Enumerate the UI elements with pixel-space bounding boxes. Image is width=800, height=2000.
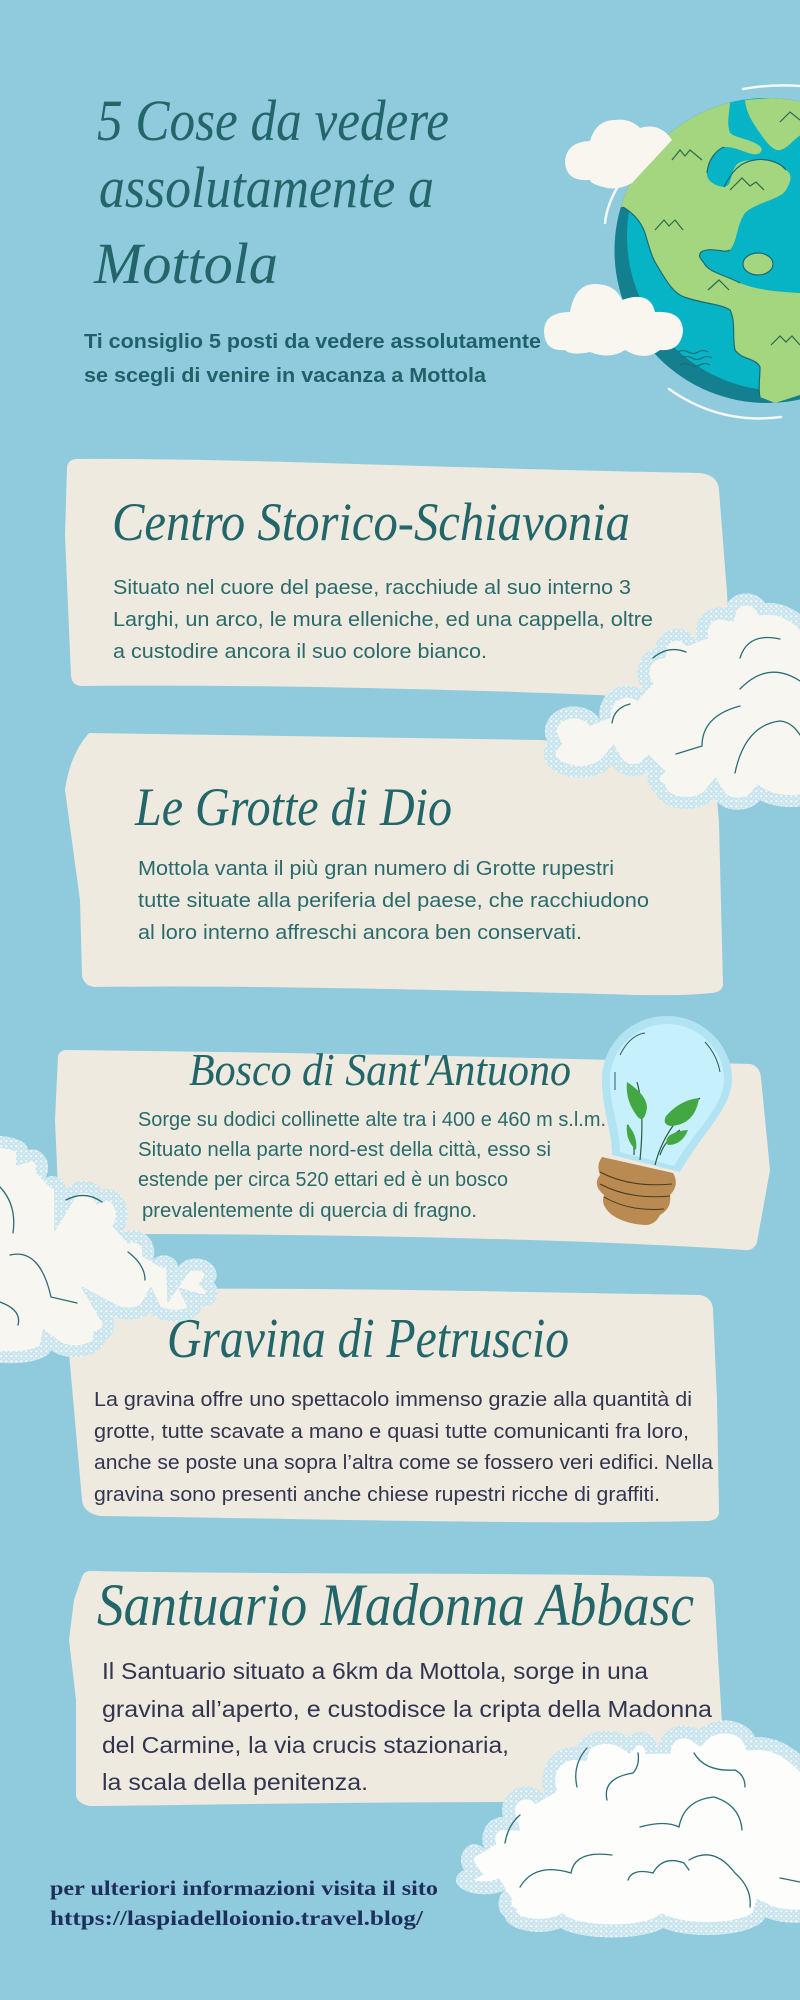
body text: del Carmine, la via crucis stazionaria, [102, 1732, 509, 1758]
body text: Situato nella parte nord-est della città, esso si [138, 1139, 551, 1161]
body text [138, 1109, 606, 1222]
icon: earth globe [544, 81, 800, 418]
footer link: per ulteriori informazioni visita il sito [50, 1876, 438, 1900]
body text: a custodire ancora il suo colore bianco. [113, 641, 487, 663]
title: 5 Cose da vedere [97, 88, 449, 153]
cloud: bottom right [456, 1720, 800, 1937]
heading: Le Grotte di Dio [134, 777, 452, 837]
white orbit arcs [605, 85, 800, 418]
body text: estende per circa 520 ettari ed è un bosco [138, 1169, 508, 1191]
body text: Il Santuario situato a 6km da Mottola, sorge in una [102, 1658, 648, 1684]
stems and leaves [627, 1082, 700, 1165]
panel: Santuario Madonna Abbasc [71, 1572, 723, 1804]
subtitle [84, 331, 541, 387]
body text: Situato nel cuore del paese, racchiude al suo interno 3 [113, 577, 631, 599]
heading: Centro Storico-Schiavonia [112, 492, 630, 552]
glass bulb [602, 1016, 732, 1172]
cloud: upper right [544, 593, 800, 810]
panel: Bosco di Sant'Antuono [57, 1044, 768, 1248]
heading: Santuario Madonna Abbasc [97, 1572, 694, 1638]
body text: gravina sono presenti anche chiese rupestri ricche di graffiti. [94, 1484, 660, 1506]
body text: al loro interno affreschi ancora ben conservati. [138, 922, 582, 944]
body text: Larghi, un arco, le mura elleniche, ed una cappella, oltre [113, 609, 653, 631]
title: assolutamente a [99, 155, 434, 220]
body text [94, 1389, 714, 1506]
body text: Sorge su dodici collinette alte tra i 400 e 460 m s.l.m. [138, 1109, 606, 1131]
body text: Mottola vanta il più gran numero di Grotte rupestri [138, 858, 614, 880]
body text [102, 1658, 712, 1795]
mountains [655, 112, 800, 345]
globe sphere [614, 98, 800, 403]
cloud lower [544, 284, 683, 356]
panel: Le Grotte di Dio [67, 735, 721, 993]
subtitle: se scegli di venire in vacanza a Mottola [84, 365, 487, 387]
body text: la scala della penitenza. [102, 1769, 368, 1795]
glass highlights [615, 1033, 720, 1090]
body text: anche se poste una sopra l’altra come se fossero veri edifici. Nella [94, 1452, 714, 1474]
body text [113, 577, 653, 663]
body text [138, 858, 649, 944]
icon: light bulb with plant [597, 1016, 732, 1225]
heading: Bosco di Sant'Antuono [189, 1044, 571, 1095]
heading: Gravina di Petruscio [167, 1308, 569, 1370]
title [93, 88, 449, 296]
waves [678, 350, 712, 366]
subtitle: Ti consiglio 5 posti da vedere assolutamente [84, 331, 541, 353]
cloud: left [0, 1136, 218, 1363]
cloud upper [565, 120, 672, 188]
panel: Gravina di Petruscio [71, 1291, 717, 1520]
body text: grotte, tutte scavate a mano e quasi tutte comunicanti fra loro, [94, 1421, 689, 1443]
brass base [597, 1157, 676, 1225]
title: Mottola [93, 231, 278, 296]
body text: prevalentemente di quercia di fragno. [142, 1200, 477, 1222]
footer link: https://laspiadelloionio.travel.blog/ [50, 1906, 424, 1930]
body text: gravina all’aperto, e custodisce la cripta della Madonna [102, 1696, 712, 1722]
body text: tutte situate alla periferia del paese, che racchiudono [138, 890, 649, 912]
lake island [743, 253, 773, 275]
panel: Centro Storico-Schiavonia [67, 461, 728, 695]
footer link [50, 1876, 438, 1930]
body text: La gravina offre uno spettacolo immenso grazie alla quantità di [94, 1389, 692, 1411]
